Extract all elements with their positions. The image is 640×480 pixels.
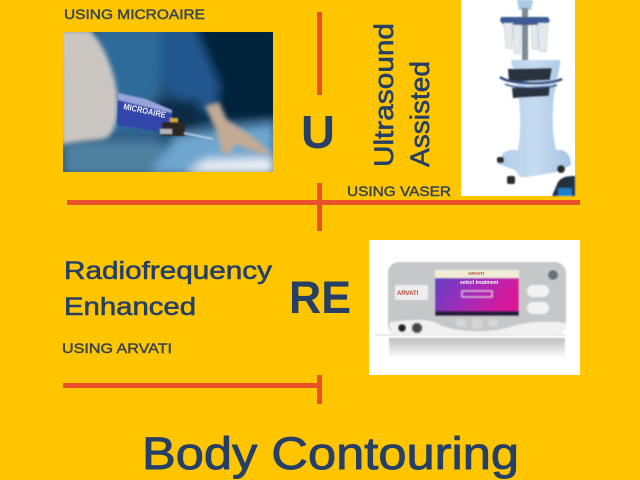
label: using microaire: USING MICROAIRE [64, 7, 205, 22]
photo: Arvati device [369, 240, 580, 375]
icon: blue handpiece [117, 93, 213, 139]
heading: Ultrasound Assisted [369, 23, 435, 167]
heading: Radiofrequency Enhanced [64, 257, 273, 321]
letters RE: RE [289, 272, 351, 323]
photo: MicroAire handpiece in surgery: MICROAIRE [123, 101, 167, 120]
photo: MicroAire handpiece in surgery [63, 32, 273, 172]
photo: Arvati device: select treatment [460, 280, 499, 286]
photo: Arvati device: ARVATI [468, 271, 484, 276]
label: using vaser: USING VASER [347, 184, 451, 199]
title: Body Contouring [142, 428, 519, 479]
photo: Arvati device: ARVATI [397, 291, 419, 297]
cross divider lines [67, 12, 580, 231]
heading: Radiofrequency Enhanced: Radiofrequency [64, 257, 273, 285]
letter U: U [301, 106, 335, 158]
label: using arvati: USING ARVATI [62, 341, 172, 356]
heading: Ultrasound Assisted: Assisted [405, 61, 435, 167]
lower divider lines [63, 375, 322, 404]
photo: Vaser cart [461, 0, 575, 196]
heading: Ultrasound Assisted: Ultrasound [369, 23, 399, 167]
heading: Radiofrequency Enhanced: Enhanced [64, 293, 196, 321]
